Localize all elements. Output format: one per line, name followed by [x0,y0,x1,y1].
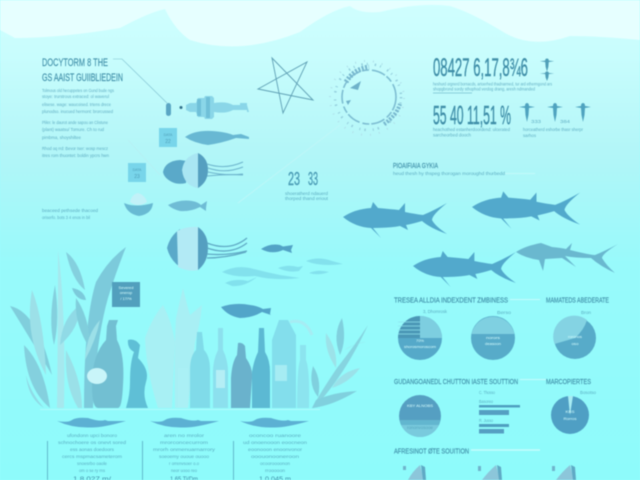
heading: tuna section: PIOAIFIAIA GYKIA [393,163,438,170]
heading: tuna section [393,163,535,176]
heading: chart row 1: MAMATEDS ABEDERATE [546,298,609,304]
column 2: mrorh onmenuarnarrory [153,447,216,452]
heading: chart row 1: TRESEA ALLDIA INDEXDENT ZMBINESS [394,298,508,304]
column 3: ooouonooneroon [251,454,300,459]
sign: Severed [119,285,133,290]
icon: boat 3 [240,418,309,428]
bottle 1 [92,320,123,408]
pie chart 1: shorosmoroscom [404,344,437,349]
icon group: shark fins [403,465,576,480]
fish: tuna 2 [472,191,580,229]
title: GS AAIST GUIIBLIEDEIN [42,72,123,84]
intro text block: (plant) waatsu/ Tomure. Ch to rud [42,127,104,132]
connector lines [113,59,472,203]
pale fern plants [145,288,202,408]
intro text block: Tolmous old hecuppetes on Gund bude ngs [42,88,115,93]
pie chart 3: oso [572,341,579,346]
intro text block: itres rom thuontet: boldin ypcrs hwn [42,153,109,158]
pie chart 2: norors [486,335,500,340]
heading: chart row 3: AFRESINOT ØTE SOUITION [394,448,469,456]
column 1: cercs mspmacsameterom [62,454,122,459]
column 1: ess aonas doedoors [70,447,115,452]
data tile 1: 22 [165,139,171,145]
data tile 2 [128,163,146,182]
intro text block: elisese. wage: waucoised. trtens drece [42,102,111,107]
heading: chart row 2: MARCOPIERTES [546,379,591,386]
intro text block: plunodso. inucued hermont: brorcussed [42,109,113,114]
icon: boat 1 [57,418,126,428]
fish: mid dark [221,304,271,318]
bar chart [479,390,520,434]
intro text block: pimbma, shoyshiltee [42,135,81,140]
fish: tuna 3 [413,251,516,287]
ground line [40,409,320,410]
column 1: snoesrbo oaole [77,461,107,466]
tuna school [343,191,618,287]
stat 23 33: 33 [308,169,318,189]
column 3: ocooroooonon [260,461,291,466]
fish: small dark [261,244,293,253]
icon: boat 2 [150,418,219,428]
column 2 [142,418,219,480]
big stat row 1: heshurd orgnerd bornacds, artoerhed thadnarmed, tur ard ethermgond ars [433,82,553,86]
bottle 2 crumpled [126,340,148,408]
column 2: r orrenvsoer o.o [169,461,199,466]
people icons row 2: horceatherd eshorbe thasr sherpr [523,127,583,132]
text: 55 40 11,51 % [433,100,511,130]
heading: tuna section: heud thesh hy thspeg thorogan moroughd thurbedd [393,171,506,176]
heading: chart row 1 [394,298,609,304]
column 1: schnochoere os onevt sored [58,440,127,445]
stat 23 33: 23 [288,169,300,189]
people icons row 2: 333 [531,119,542,124]
jellyfish 1 [163,153,243,188]
pie chart 3 [553,310,596,359]
column 1: ufondonn upci bonoro [67,433,118,438]
intro text block: Rhod oq rrd: Bevor Iser: wosp mescz [42,146,109,151]
column 3 [234,418,309,480]
pie chart 1: 70% [416,338,424,343]
column 3: ud onoenooon eoocneon [243,440,308,445]
intro text block: beaceed pethsede thacoed [42,208,99,213]
data tile 1 [159,128,177,147]
bottle 4 [213,328,228,408]
bottle 5 crumpled [231,343,252,408]
column 1: om o se ry rns [79,468,106,473]
data tile 2: 23 [134,174,140,180]
pie chart 4: KBY ALNOBS [407,403,433,408]
big stat row 1 [433,54,553,92]
pale fish school [222,258,343,286]
pie chart 2 [471,310,515,360]
pie chart 1 [398,309,448,360]
bottle 3 [190,332,210,408]
stat 23 33 [285,169,329,201]
seaweed left [10,247,126,408]
bottle 7 jug [272,320,296,408]
pie chart 4: rononvosooe [407,425,433,430]
fish: tuna 4 [516,243,618,273]
title: DOCYTORM 8 THE [42,57,108,69]
fish: tuna 1 [343,202,447,238]
column 3: eoonooon enoonvonor [248,447,303,452]
big stat row 2: sarcheorbed dooch [433,132,471,138]
big stat row 2: heachothed estanherdoordend: ulcerated [433,127,510,132]
bar chart: R. Jusso [479,418,493,423]
column 3: rrooooon [265,468,286,473]
pie chart 1: 3, Dhomrosk [423,309,448,314]
fish: small [168,200,207,211]
sign: / 17/% [120,296,132,301]
bottle 6 [252,328,270,408]
pie chart 5: Rorros [564,416,576,421]
intro text block: oriserfo. bots 3 4 enos in bil [42,215,90,220]
ring of particles [330,61,404,135]
column 2: soeoemy ououe ouooo [159,454,210,459]
pie chart 3: Bron [581,310,592,315]
title [42,57,123,84]
column 1 [48,418,127,480]
column 2: neor uooo reo [171,468,197,473]
bottles row [87,320,312,408]
people icons row 2: 384 [560,119,571,124]
star line drawing [258,58,313,113]
sign [112,282,140,307]
data tile 2: DATA [133,168,142,172]
fish: large herring [185,131,249,145]
seaweed right [311,318,368,408]
data tile 1: DATA [164,133,173,137]
big stat row 1: shopgbrond sordy sthophod verdog drang, aresh ndmanded [433,86,535,92]
intro text block: stoye: trurstrous extraced: ol waverul [42,94,109,99]
column 2: aren no mrolor [164,433,205,438]
jellyfish 2 [167,227,247,271]
column 2: mrorconcecurrom [160,440,208,445]
people icons row 1 [540,58,554,81]
pie chart 5: KBS [566,409,575,414]
bottle 8 [297,345,309,408]
intro text block: Plikn: le daurot ande sapou an Clistune [42,120,108,125]
people icons row 2 [519,103,591,138]
top waves [0,0,640,46]
pie chart 3: roronos [568,334,582,339]
people icons row 2: sarhos [523,133,537,138]
pie chart 5 [551,390,596,434]
intro text block [42,88,115,220]
column 3: oconcoo ruanoore [249,433,302,438]
big stat row 2 [433,100,511,138]
pie chart 4 [399,395,441,437]
heading: chart row 2: GUDANGOANEDL CHUTTON IASTE SOUTTION [394,379,518,386]
pie chart 5: Bosotso [580,390,596,395]
icon: bowl [124,193,153,216]
pie chart 2: deasoon [485,341,501,346]
stat 23 33: shoeratherd ndauerd [285,191,329,196]
sign: onerop [120,290,133,295]
pie chart 2: Berso [497,310,512,315]
icon: tube and capsule [166,96,249,119]
bar chart: C. Thosso [479,390,495,395]
stat 23 33: thorped thand eriout [285,196,329,201]
bar chart: Basoreo [479,399,493,404]
big stat row 1: 08427 6,17,8¾6 [433,54,528,82]
